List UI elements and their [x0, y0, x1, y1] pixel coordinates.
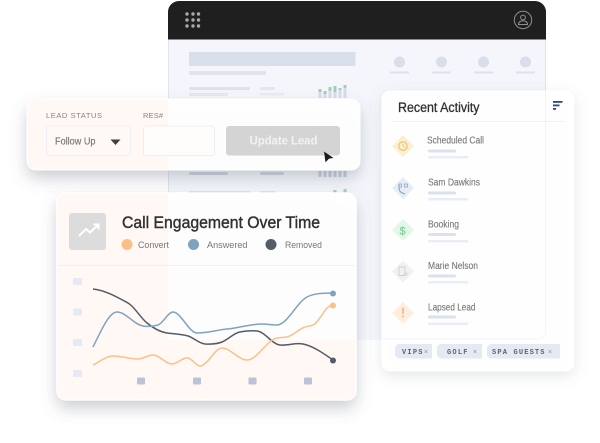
input: res number [144, 126, 214, 156]
dashboard top bar [168, 1, 546, 40]
item: scheduled call: Scheduled Call [427, 136, 484, 146]
legend: Answered [207, 240, 248, 251]
x axis ticks [137, 378, 312, 384]
item: lapsed lead: Lapsed Lead [428, 302, 476, 314]
dashboard heading placeholder [189, 52, 356, 66]
item: sam dawkins [392, 177, 480, 200]
tag: spa guests: × [548, 349, 552, 356]
line: convert [93, 302, 336, 366]
button: update lead: Update Lead [250, 136, 318, 148]
tag: vips: × [424, 349, 428, 356]
button: update lead [226, 126, 340, 156]
dashboard row three [189, 189, 346, 194]
y axis ticks [73, 278, 82, 377]
panel: recent activity [382, 91, 574, 371]
icon: user profile [514, 11, 532, 29]
tag: golf: GOLF [447, 349, 468, 357]
icon: trending up [69, 213, 106, 250]
item: marie nelson: Marie Nelson [428, 261, 478, 272]
tag: golf [437, 344, 482, 358]
dropdown: follow up [46, 126, 130, 156]
legend: Removed [285, 240, 322, 251]
icon: cursor [324, 152, 334, 162]
line: answered [93, 290, 336, 347]
item: scheduled call [392, 135, 484, 158]
label: lead status: LEAD STATUS [46, 111, 102, 120]
icon: filter [553, 101, 562, 110]
item: booking: Booking [428, 220, 459, 230]
panel: dashboard window [168, 1, 546, 340]
item: lapsed lead [392, 302, 476, 325]
item: booking: $ [400, 226, 406, 238]
item: sam dawkins: Sam Dawkins [428, 178, 480, 188]
tag: golf: × [473, 349, 477, 356]
item: booking [392, 219, 468, 242]
tag: vips: VIPS [402, 349, 422, 357]
dashboard row two [189, 171, 346, 177]
line: removed [93, 289, 336, 364]
label: res number: RES# [143, 111, 164, 120]
dashboard subheading placeholder [189, 71, 266, 75]
tag: spa guests: SPA GUESTS [492, 349, 544, 357]
legend [122, 239, 322, 251]
dashboard row one [189, 85, 346, 98]
panel: call engagement chart [57, 193, 356, 400]
legend: Convert [138, 240, 169, 251]
dashboard avatars [390, 56, 535, 74]
tag: spa guests [487, 344, 560, 358]
panel: lead status form [27, 99, 360, 170]
icon: app grid [185, 12, 200, 28]
dropdown: follow up: Follow Up [55, 136, 96, 148]
item: marie nelson [392, 260, 478, 284]
tag: vips [395, 344, 432, 358]
heading: recent activity: Recent Activity [398, 100, 480, 115]
chart title: Call Engagement Over Time [122, 214, 320, 232]
